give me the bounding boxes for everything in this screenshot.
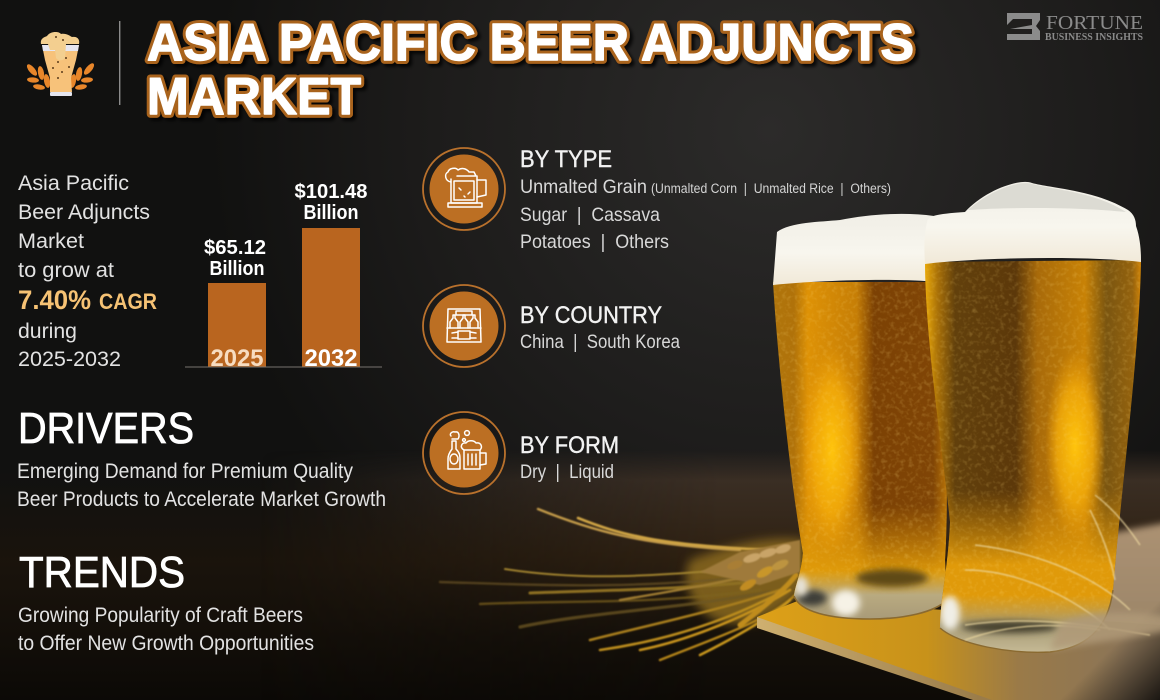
icon: six-pack crate <box>423 285 505 367</box>
CAGR text block: Asia Pacific <box>18 172 129 195</box>
title: MARKET <box>147 68 361 126</box>
title: ASIA PACIFIC BEER ADJUNCTS <box>147 14 914 72</box>
right glass base <box>936 595 1121 657</box>
by type: Unmalted Grain <box>520 176 647 198</box>
header divider <box>119 21 120 105</box>
CAGR text block: Market <box>18 230 84 253</box>
by country: China | South Korea <box>520 331 680 353</box>
CAGR text block: 7.40% <box>18 285 91 315</box>
logo: Fortune Business Insights: BUSINESS INSIGHTS <box>1045 32 1143 43</box>
trends: TRENDS <box>19 548 185 597</box>
CAGR text block: during <box>18 320 77 343</box>
CAGR text block: Beer Adjuncts <box>18 201 150 224</box>
wheat photo: stalks on the table <box>440 509 805 660</box>
by type <box>520 146 891 253</box>
by type: Sugar | Cassava <box>520 204 660 226</box>
wooden board <box>757 600 1160 700</box>
bar chart: 2032 <box>304 345 358 372</box>
bar chart: $65.12 <box>204 237 266 259</box>
by form: BY FORM <box>520 432 619 459</box>
drivers: DRIVERS <box>18 404 194 453</box>
logo: Fortune Business Insights <box>1007 12 1143 43</box>
title <box>147 14 914 126</box>
right beer glass <box>922 182 1160 657</box>
CAGR text block <box>18 172 157 371</box>
left glass base <box>790 569 950 622</box>
title: MARKET <box>147 68 361 126</box>
icon: beer mug <box>423 148 505 230</box>
bar chart: Billion <box>304 202 358 224</box>
drivers: Emerging Demand for Premium Quality <box>17 460 353 483</box>
CAGR text block: to grow at <box>18 259 114 282</box>
drivers <box>17 404 386 511</box>
trends: Growing Popularity of Craft Beers <box>18 604 303 627</box>
CAGR text block: CAGR <box>99 289 157 314</box>
by form <box>520 432 619 483</box>
trends: to Offer New Growth Opportunities <box>18 632 314 655</box>
by country <box>520 302 680 353</box>
drivers: Beer Products to Accelerate Market Growth <box>17 488 386 511</box>
by form: Dry | Liquid <box>520 461 614 483</box>
CAGR text block: 2025-2032 <box>18 348 121 371</box>
by country: BY COUNTRY <box>520 302 662 329</box>
by type: Potatoes | Others <box>520 231 669 253</box>
left beer glass <box>770 214 950 625</box>
by type: (Unmalted Corn | Unmalted Rice | Others) <box>651 181 891 196</box>
bar chart <box>185 181 382 372</box>
bar chart: Billion <box>210 258 264 280</box>
bar chart: $101.48 <box>294 181 368 203</box>
bar chart: 2025 <box>210 345 264 372</box>
icon: beer glass with wreath <box>25 32 96 96</box>
trends <box>18 548 314 655</box>
by type: BY TYPE <box>520 146 612 173</box>
title: ASIA PACIFIC BEER ADJUNCTS <box>147 14 914 72</box>
logo: Fortune Business Insights: FORTUNE <box>1046 12 1143 34</box>
icon: bottle and mug <box>423 412 505 494</box>
